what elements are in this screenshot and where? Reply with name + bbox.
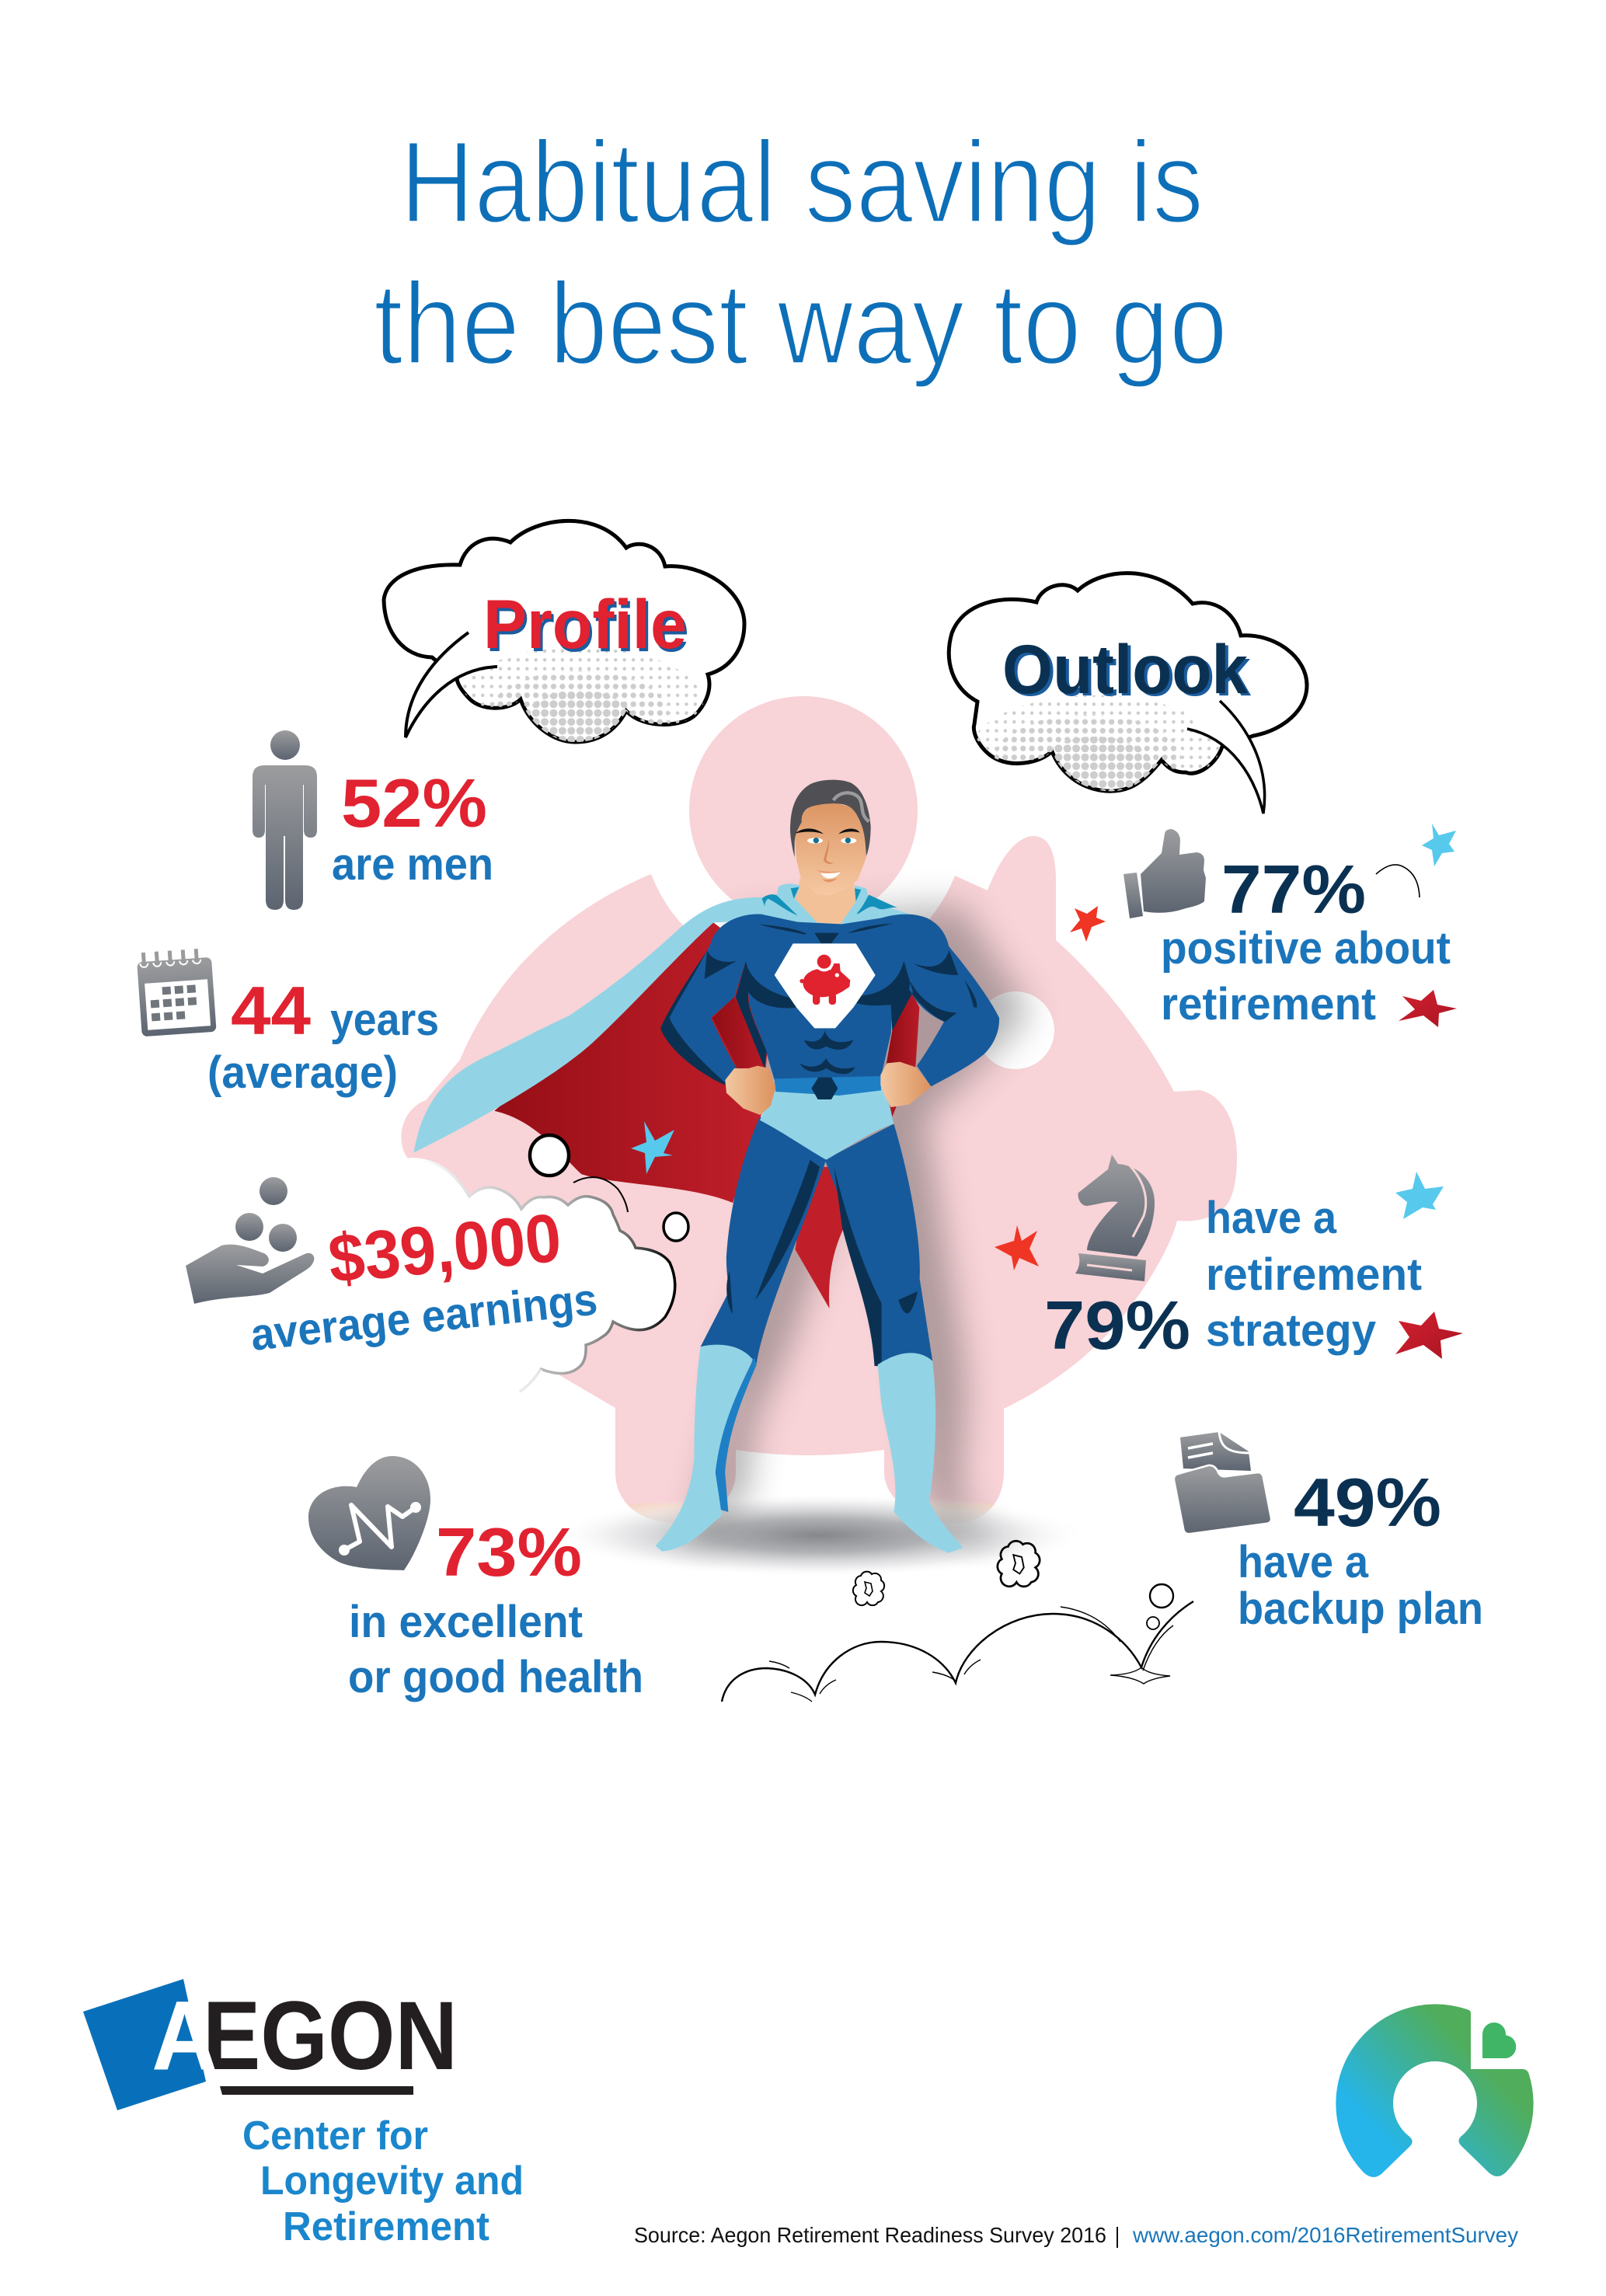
source line: [634, 2223, 1518, 2248]
cape: [414, 897, 845, 1308]
icon: folder with document: [1174, 1432, 1271, 1534]
center for longevity and retirement: Center for: [242, 2113, 428, 2158]
decorative stars right middle: [995, 1172, 1463, 1359]
stat: 79% strategy: have a: [1206, 1193, 1337, 1243]
title: Habitual saving is: [400, 117, 1204, 247]
stat: 77% positive: retirement: [1161, 979, 1376, 1030]
stat: 79% strategy: retirement: [1206, 1249, 1422, 1300]
superhero figure: [414, 780, 999, 1553]
stat: 52% are men: 52%: [341, 765, 487, 841]
stat: $39,000 average earnings: average earnings: [249, 1273, 600, 1361]
coin: [689, 696, 918, 925]
center for longevity and retirement: Retirement: [283, 2204, 489, 2249]
stat: 52% are men: are men: [332, 839, 493, 890]
chest emblem: [775, 943, 876, 1028]
center for longevity and retirement: Longevity and: [260, 2158, 524, 2204]
profile heading: Profile: [483, 585, 687, 663]
stat: 77% positive: [1161, 851, 1451, 1030]
stat: 44 years average: 44: [231, 972, 311, 1049]
icon: hand with coins: [186, 1177, 314, 1304]
hero drop shadow: [690, 906, 1031, 1545]
hood: [761, 883, 911, 925]
thought arc: [573, 1177, 628, 1212]
stat: 73% health: in excellent: [349, 1597, 583, 1647]
center for longevity and retirement: [242, 2113, 524, 2249]
profile speech bubble: [384, 521, 744, 759]
stat: 44 years average: years: [330, 995, 439, 1045]
stat: 49% backup plan: backup plan: [1238, 1584, 1483, 1634]
source line: www.aegon.com/2016RetirementSurvey: [1132, 2223, 1518, 2247]
stat: 73% health: or good health: [348, 1652, 643, 1702]
fists: [725, 1066, 775, 1115]
right arm: [904, 946, 999, 1086]
title: the best way to go: [374, 258, 1228, 388]
stat: $39,000 average earnings: $39,000: [325, 1199, 564, 1298]
stat: 52% are men: [332, 765, 493, 890]
legs and boots: [656, 1085, 963, 1553]
stat: 77% positive: positive about: [1161, 923, 1451, 974]
upper body: [660, 780, 999, 1117]
torso: [711, 915, 949, 1080]
outlook heading: Outlook: [1002, 630, 1248, 708]
stat: 77% positive: 77%: [1221, 851, 1366, 928]
stat: 73% health: [348, 1514, 643, 1702]
neck: [795, 878, 856, 924]
heart keyhole logo: [1336, 2004, 1534, 2177]
stat: 79% strategy: strategy: [1206, 1305, 1376, 1356]
pig eye: [977, 991, 1054, 1069]
stat: 49% backup plan: have a: [1238, 1537, 1369, 1587]
bouncing ball trail: [722, 1541, 1193, 1702]
icon: heart with pulse: [308, 1456, 430, 1570]
thought bubble large: [530, 1135, 569, 1176]
piggy bank background: [401, 696, 1237, 1527]
stat: $39,000 average earnings: [249, 1199, 600, 1361]
muscle shading: [705, 923, 977, 1074]
outlook heading: Outlook: [1005, 632, 1251, 710]
Aegon logo: [83, 1979, 458, 2110]
stat: 44 years average: (average): [207, 1047, 398, 1098]
Aegon logo: A: [152, 1982, 217, 2090]
title: [374, 117, 1228, 388]
source line: Source: Aegon Retirement Readiness Survey 2016: [634, 2223, 1106, 2247]
profile heading: Profile: [486, 588, 689, 666]
icon: calendar: [136, 948, 217, 1037]
face details: [795, 828, 860, 834]
icon: person: [253, 730, 317, 910]
stat: 49% backup plan: 49%: [1294, 1464, 1441, 1541]
outlook speech bubble: [949, 573, 1307, 814]
decorative stars right top: [1070, 824, 1457, 1027]
belt: [775, 1076, 881, 1096]
stat: 79% strategy: [1044, 1193, 1422, 1364]
ground shadow: [552, 1493, 1088, 1577]
hair: [790, 780, 871, 857]
icon: thumbs up: [1124, 829, 1206, 918]
thought bubble small: [664, 1213, 688, 1241]
stat: 49% backup plan: [1238, 1464, 1483, 1634]
Aegon logo: EGON: [203, 1982, 458, 2090]
stat: 73% health: 73%: [436, 1514, 582, 1590]
icon: chess knight: [1075, 1155, 1155, 1281]
head: [795, 803, 866, 896]
stat: 44 years average: [207, 972, 439, 1098]
piggy emblem: [800, 952, 850, 1005]
blue star on cape: [631, 1121, 674, 1174]
thought cloud: earnings: [350, 1135, 688, 1399]
left arm: [660, 950, 725, 1085]
stat: 79% strategy: 79%: [1044, 1287, 1190, 1364]
